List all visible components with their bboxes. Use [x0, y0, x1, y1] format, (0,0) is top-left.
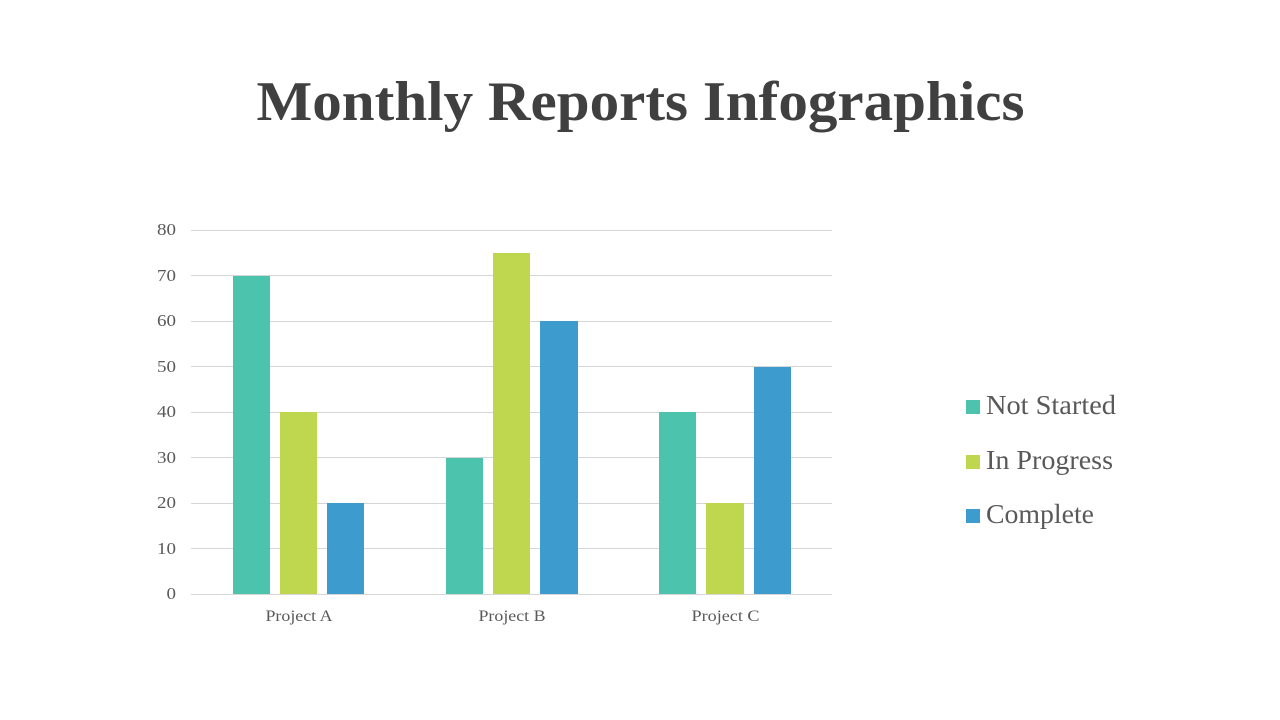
y axis labels: 80 — [157, 220, 176, 239]
y axis labels: 50 — [157, 357, 176, 376]
y axis labels: 70 — [157, 266, 176, 285]
y axis labels: 0 — [166, 584, 176, 603]
y axis labels: 60 — [157, 311, 176, 330]
x axis labels — [266, 608, 760, 625]
title: Monthly Reports Infographics — [256, 71, 1024, 133]
y axis labels — [157, 220, 176, 603]
x axis labels: Project A — [266, 608, 333, 625]
bar chart — [157, 220, 832, 625]
bars: Project C — [659, 367, 791, 594]
legend item: Not Started: Not Started — [986, 390, 1117, 420]
legend item: In Progress: In Progress — [986, 445, 1113, 475]
x axis labels: Project C — [692, 608, 760, 625]
y axis labels: 10 — [157, 539, 176, 558]
y axis labels: 40 — [157, 402, 176, 421]
bars: Project A — [233, 276, 364, 594]
legend item: Complete: Complete — [986, 499, 1094, 529]
bars: Project B — [446, 253, 578, 594]
legend — [966, 390, 1117, 529]
y axis labels: 20 — [157, 493, 176, 512]
y axis labels: 30 — [157, 448, 176, 467]
x axis labels: Project B — [478, 608, 546, 625]
